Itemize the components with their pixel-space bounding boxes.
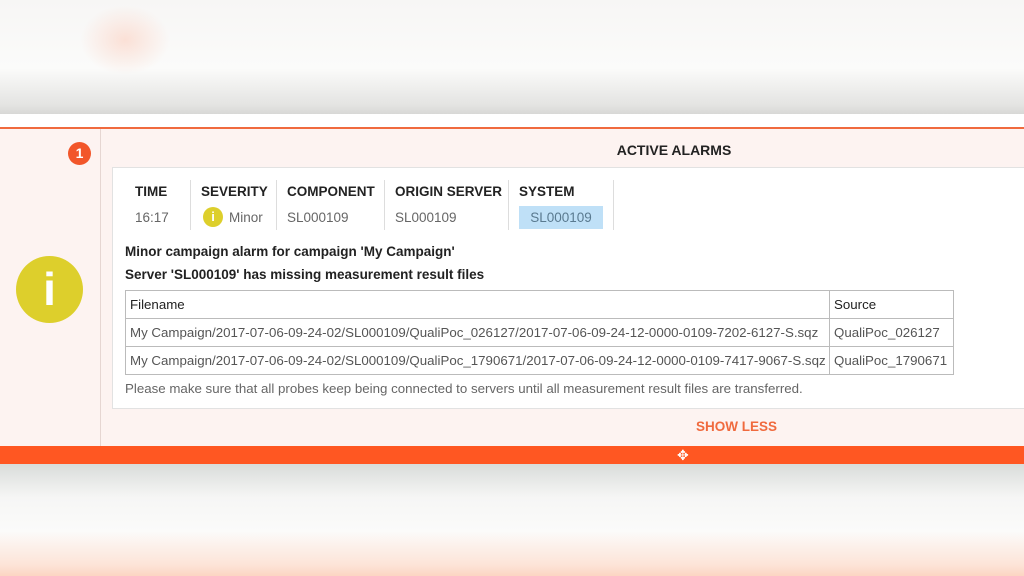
columns header: SL000109 bbox=[395, 210, 457, 225]
details box bbox=[112, 167, 1024, 409]
file table: My Campaign/2017-07-06-09-24-02/SL000109/QualiPoc_1790671/2017-07-06-09-24-12-0000-0109-7417-9067-S.sqz bbox=[130, 353, 826, 368]
file table: QualiPoc_1790671 bbox=[834, 353, 947, 368]
left column bbox=[0, 129, 101, 446]
file table bbox=[125, 290, 954, 375]
message: Server 'SL000109' has missing measurement result files bbox=[125, 267, 484, 282]
note: Please make sure that all probes keep being connected to servers until all measurement result files are transferred. bbox=[125, 381, 803, 396]
columns header: SEVERITY bbox=[201, 184, 268, 199]
icon: info circle: i bbox=[43, 263, 56, 315]
heading: ACTIVE ALARMS bbox=[617, 142, 731, 158]
file table: Source bbox=[834, 297, 876, 312]
alarm panel bbox=[0, 127, 1024, 446]
columns header bbox=[135, 184, 603, 229]
file table: Filename bbox=[130, 297, 185, 312]
columns header: ORIGIN SERVER bbox=[395, 184, 502, 199]
columns header: 16:17 bbox=[135, 210, 169, 225]
columns header: TIME bbox=[135, 184, 167, 199]
message bbox=[125, 244, 484, 282]
file table: My Campaign/2017-07-06-09-24-02/SL000109/QualiPoc_026127/2017-07-06-09-24-12-0000-0109-7202-6127-S.sqz bbox=[130, 325, 818, 340]
show less button: SHOW LESS bbox=[696, 419, 777, 434]
icon: minor bbox=[203, 207, 223, 227]
icon: minor: i bbox=[211, 209, 215, 224]
icon: move: ✥ bbox=[677, 447, 689, 463]
columns header: SYSTEM bbox=[519, 184, 575, 199]
columns header: COMPONENT bbox=[287, 184, 375, 199]
file table: QualiPoc_026127 bbox=[834, 325, 940, 340]
orange bar bbox=[0, 446, 1024, 464]
columns header: SL000109 bbox=[530, 210, 592, 225]
icon: info circle bbox=[16, 256, 83, 323]
background top blur bbox=[0, 0, 1024, 114]
message: Minor campaign alarm for campaign 'My Campaign' bbox=[125, 244, 455, 259]
columns header: SL000109 bbox=[287, 210, 349, 225]
background bottom bbox=[0, 464, 1024, 576]
columns header: Minor bbox=[229, 210, 263, 225]
badge: count 1: 1 bbox=[76, 145, 83, 161]
badge: count 1 bbox=[68, 142, 91, 165]
